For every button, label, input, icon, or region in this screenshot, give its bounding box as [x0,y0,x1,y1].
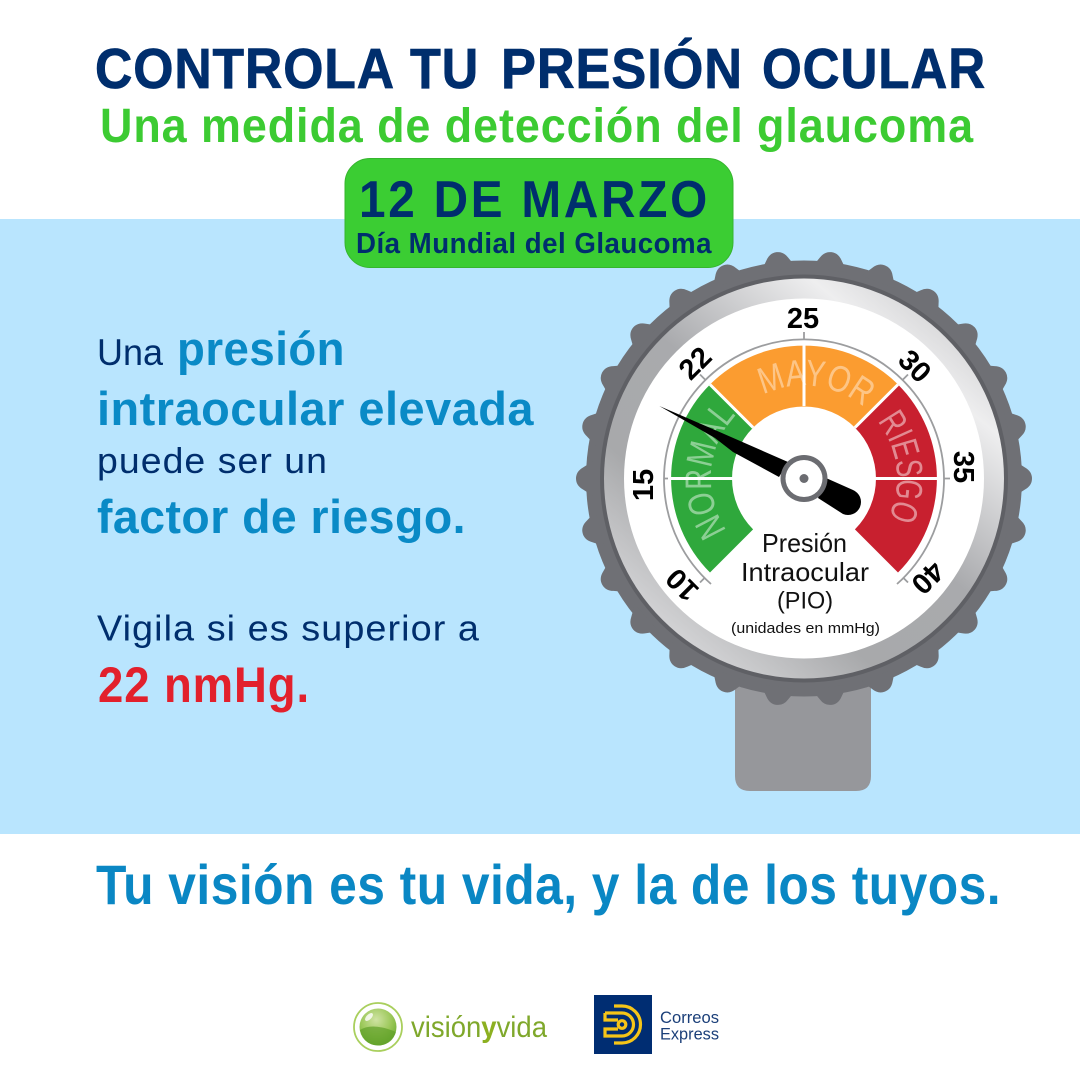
line: 22 nmHg: 22 nmHg. [98,657,310,713]
title: CONTROLA [95,37,395,101]
line: intraocular elevada: intraocular elevada [97,382,534,435]
logo eye icon [354,1003,402,1051]
title: OCULAR [762,37,986,101]
title: PRESIÓN [501,37,743,101]
date badge [345,158,733,268]
scale numbers: 35 [947,451,979,483]
zone: mayor: MAYOR [757,360,874,406]
badge caption: Día Mundial del Glaucoma [356,228,712,260]
scale numbers [628,303,979,607]
gauge label: Intraocular [741,557,869,587]
line: puede ser un: puede ser un [97,440,328,481]
zone dividers [668,344,940,478]
gauge face [624,298,984,658]
logo wordmark: visiónyvida [411,1011,547,1044]
scale numbers: 22 [673,341,718,386]
scale numbers: 15 [628,469,660,501]
line: Una presión: Una [97,332,163,373]
title [95,37,986,101]
line: Una presión [97,322,345,375]
pressure gauge [576,252,1032,791]
gauge label [731,528,880,637]
logo wordmark [660,1008,719,1044]
zone: normal [671,384,753,572]
line: Vigila: Vigila si es superior a [97,608,480,648]
line: Una presión: presión [177,322,345,375]
gauge bezel [604,278,1004,678]
left message text [97,322,534,713]
scale arc and ticks [664,332,950,584]
title: TU [410,37,479,101]
logo wordmark: Express [660,1024,719,1044]
logo: Correos Express [594,995,719,1054]
logo square with emblem [594,995,652,1054]
logo wordmark: Correos [660,1008,719,1027]
zone: riesgo [855,384,937,572]
scale numbers: 30 [892,344,937,389]
zone: riesgo: RIESGO [878,409,922,522]
gauge stem [735,680,871,791]
zone: normal: NORMAL [686,408,736,540]
scale numbers: 25 [787,303,819,335]
blue background panel [0,219,1080,834]
line: factor de riesgo: factor de riesgo. [97,490,466,543]
badge date: 12 DE MARZO [359,171,710,229]
scale numbers: 40 [905,555,950,600]
scale numbers: 10 [660,562,705,607]
gauge knurled rim [576,250,1032,707]
gauge label: (PIO) [777,588,833,614]
logo: vision y vida [354,1003,547,1051]
subtitle: Una medida de detección del glaucoma [100,100,974,153]
zone: mayor [710,346,898,428]
gauge label: (unidades en mmHg) [731,620,880,637]
gauge needle [659,406,861,515]
gauge label: Presión [762,528,847,558]
